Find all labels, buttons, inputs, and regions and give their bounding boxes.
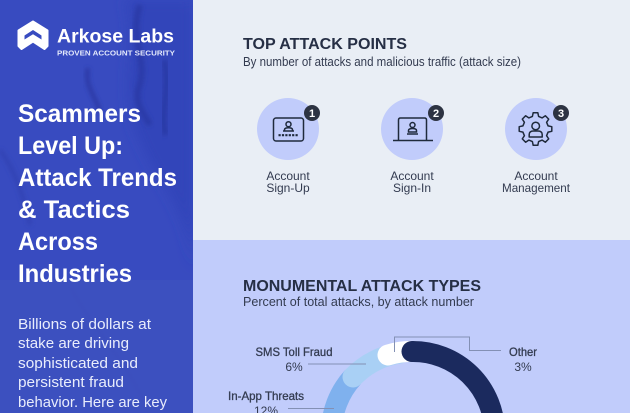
label: sms toll fraud: 6%: [285, 360, 303, 374]
label: other: Other: [509, 345, 537, 359]
leader line: other: [394, 337, 501, 352]
label: account sign-up: Sign-Up: [266, 181, 310, 195]
segment: largest attack type: [412, 351, 494, 413]
segment: other: [388, 351, 415, 355]
intro text: Billions of dollars at: [18, 317, 151, 333]
label: in-app threats: In-App Threats: [228, 389, 304, 403]
panel: top attack points: [193, 0, 630, 240]
leader line: in-app threats: [288, 408, 334, 410]
heading: monumental attack types: MONUMENTAL ATTACK TYPES: [243, 278, 481, 295]
label: account sign-up: [266, 169, 310, 195]
label: account sign-in: Account: [390, 169, 434, 183]
logo tagline: PROVEN ACCOUNT SECURITY: [57, 48, 175, 58]
main title: Attack Trends: [18, 164, 177, 192]
panel: left sidebar: [0, 0, 193, 413]
intro text: stake are driving: [18, 336, 129, 352]
item 2: account sign-in: [381, 98, 444, 195]
main title: Scammers: [18, 100, 141, 128]
main title: Industries: [18, 260, 132, 288]
label: sms toll fraud: SMS Toll Fraud: [256, 345, 332, 359]
number badge 3: 3: [558, 108, 564, 120]
logo: Arkose Labs: [18, 22, 175, 58]
label: account sign-in: [390, 169, 434, 195]
number badge 2: 2: [433, 108, 439, 120]
label: account sign-up: Account: [266, 169, 310, 183]
segment: sms toll fraud: [353, 353, 400, 377]
segment: in-app threats: [331, 377, 353, 413]
label: in-app threats: [228, 389, 304, 413]
main title: [18, 100, 177, 288]
subheading: top attack points: By number of attacks and malicious traffic (attack size): [243, 55, 521, 69]
main title: Across: [18, 228, 98, 256]
intro text: [18, 317, 168, 411]
label: account management: Management: [502, 181, 571, 195]
intro text: persistent fraud: [18, 375, 124, 391]
leader line: sms toll fraud: [308, 363, 366, 365]
subheading: monumental attack types: Percent of total attacks, by attack number: [243, 295, 474, 309]
icon: laptop with user: [393, 118, 433, 140]
label: account sign-in: Sign-In: [393, 181, 431, 195]
intro text: behavior. Here are key: [18, 395, 168, 411]
intro text: sophisticated and: [18, 356, 138, 372]
label: sms toll fraud: [256, 345, 332, 374]
main title: Level Up:: [18, 132, 123, 160]
label: other: [509, 345, 537, 374]
icon: card with user and password: [274, 118, 304, 141]
heading: top attack points: TOP ATTACK POINTS: [243, 36, 407, 53]
item 1: account sign-up: [257, 98, 320, 195]
number badge 1: 1: [309, 108, 315, 120]
icon: Arkose shield mark: [18, 22, 48, 49]
donut chart: [331, 351, 494, 413]
label: account management: [502, 169, 571, 195]
label: account management: Account: [514, 169, 558, 183]
label: other: 3%: [514, 360, 532, 374]
panel: monumental attack types: [193, 240, 630, 413]
logo wordmark: Arkose Labs: [57, 26, 174, 48]
item 3: account management: [502, 98, 571, 195]
icon: gear with user: [519, 113, 552, 145]
main title: & Tactics: [18, 196, 130, 224]
